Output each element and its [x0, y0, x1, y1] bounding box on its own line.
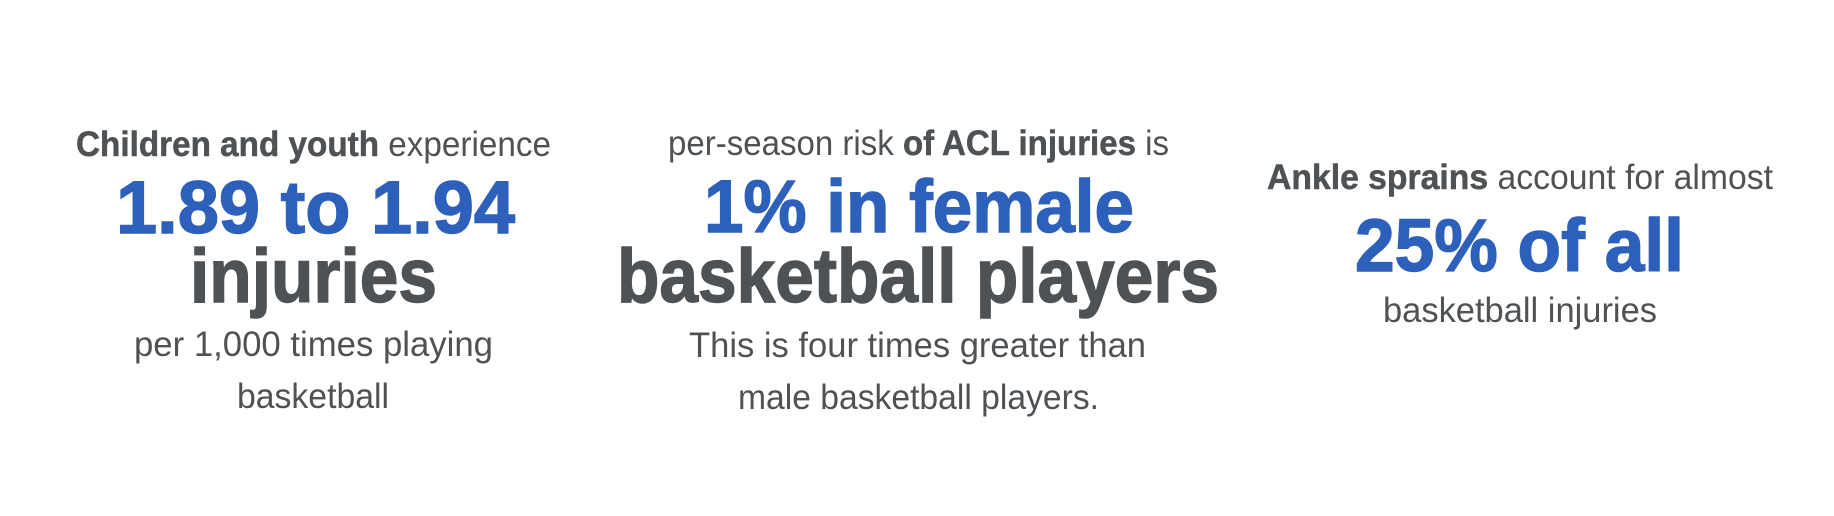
detail line 2: male basketball players.	[738, 378, 1099, 417]
detail line 1: This is four times greater than	[689, 326, 1146, 365]
panel: children and youth	[76, 125, 551, 416]
detail line 2: basketball	[237, 377, 389, 416]
big blue statistic: 1% in female	[704, 165, 1134, 248]
big blue statistic: 25% of all	[1355, 204, 1684, 287]
big blue statistic: 1.89 to 1.94	[116, 166, 515, 249]
lead-in text: Children and youth experience	[76, 125, 551, 164]
detail line 1: per 1,000 times playing	[134, 325, 493, 364]
lead-in text: Ankle sprains account for almost	[1267, 158, 1773, 197]
big grey label: injuries	[190, 234, 437, 319]
detail line: basketball injuries	[1383, 291, 1657, 330]
panel: ankle sprains	[1267, 158, 1773, 330]
big grey label: basketball players	[617, 234, 1219, 319]
lead-in text: per-season risk of ACL injuries is	[668, 124, 1169, 163]
panel: ACL injuries	[617, 124, 1219, 417]
